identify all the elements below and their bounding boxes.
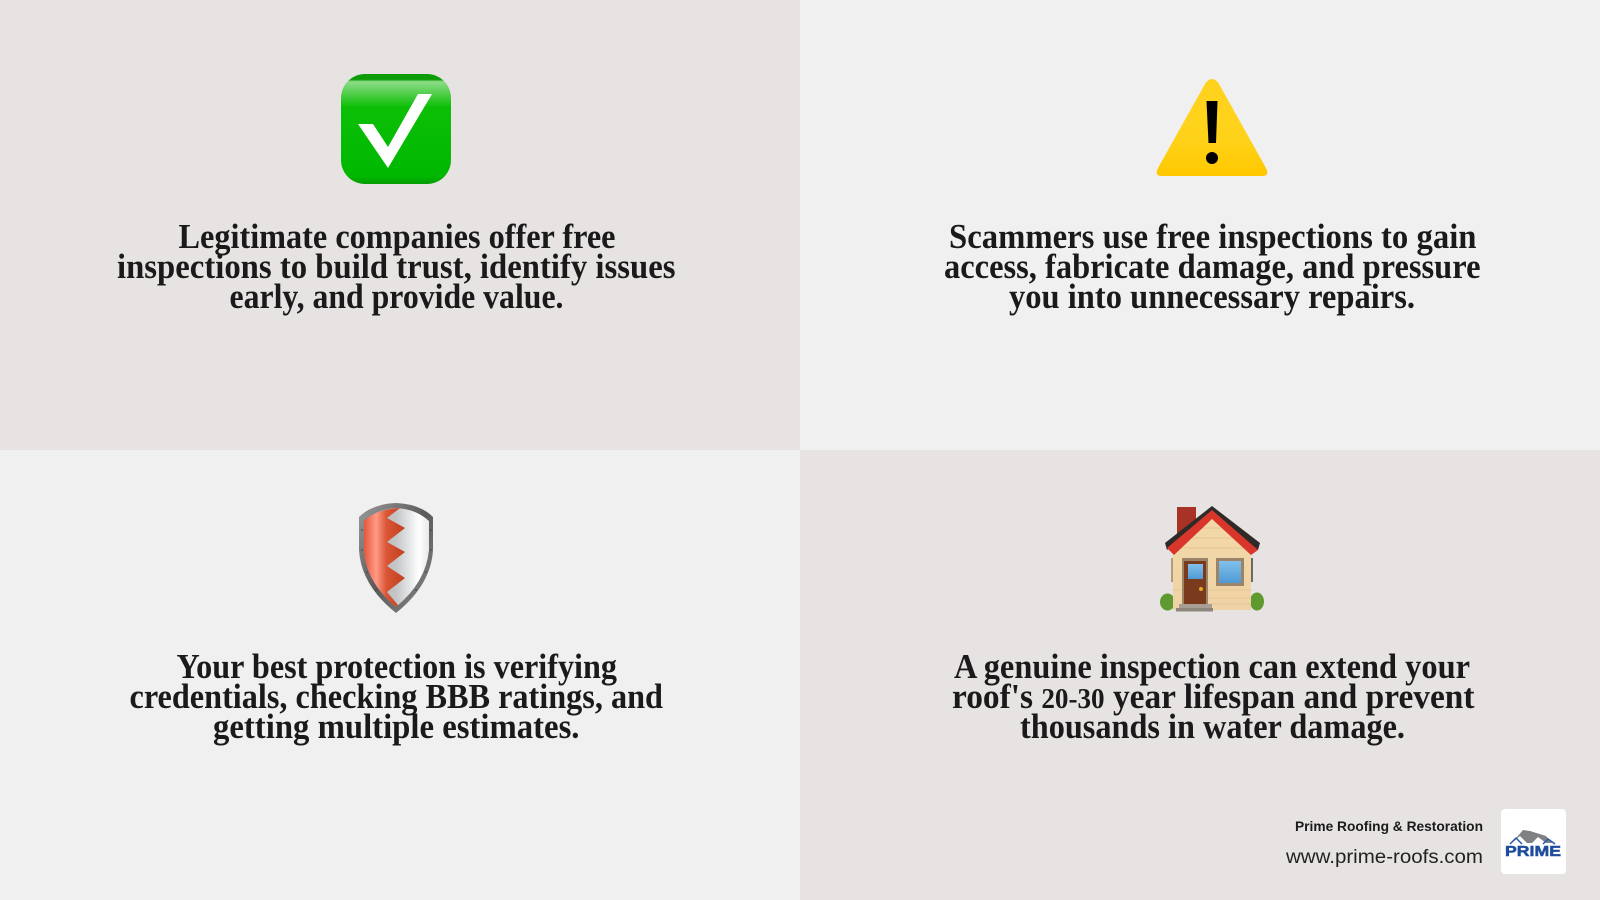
text: scammers: you into unnecessary repairs. <box>1009 278 1415 316</box>
icon: warning triangle <box>1157 79 1267 176</box>
panel: best protection <box>0 450 800 900</box>
text: genuine inspection: A genuine inspection can extend your <box>954 648 1470 686</box>
text: legitimate companies: early, and provide value. <box>230 278 564 316</box>
text: genuine inspection: thousands in water damage. <box>1020 708 1405 746</box>
icon: shield <box>359 503 433 613</box>
logo: Prime <box>1501 809 1566 874</box>
text: best protection: credentials, checking BBB ratings, and <box>130 678 663 716</box>
icon: house <box>1160 506 1264 612</box>
text: legitimate companies: inspections to build trust, identify issues <box>117 248 676 286</box>
logo: Prime: PRIME <box>1505 843 1561 860</box>
text: legitimate companies: Legitimate companies offer free <box>178 218 616 256</box>
panel: legitimate companies <box>0 0 800 450</box>
text: genuine inspection: roof's 20-30 year lifespan and prevent <box>952 678 1475 716</box>
text: best protection: Your best protection is verifying <box>176 648 617 686</box>
footer: company name: Prime Roofing & Restoration <box>1295 818 1483 834</box>
footer: website: www.prime-roofs.com <box>1285 847 1483 868</box>
text: scammers <box>944 218 1480 316</box>
text: legitimate companies <box>117 218 676 316</box>
text: best protection: getting multiple estimates. <box>213 708 580 746</box>
panel: scammers <box>800 0 1600 450</box>
text: genuine inspection <box>952 648 1475 746</box>
panel: genuine inspection <box>800 450 1600 900</box>
icon: green check mark <box>341 74 451 184</box>
text: scammers: Scammers use free inspections to gain <box>949 218 1476 256</box>
text: best protection <box>130 648 663 746</box>
text: scammers: access, fabricate damage, and pressure <box>944 248 1480 286</box>
